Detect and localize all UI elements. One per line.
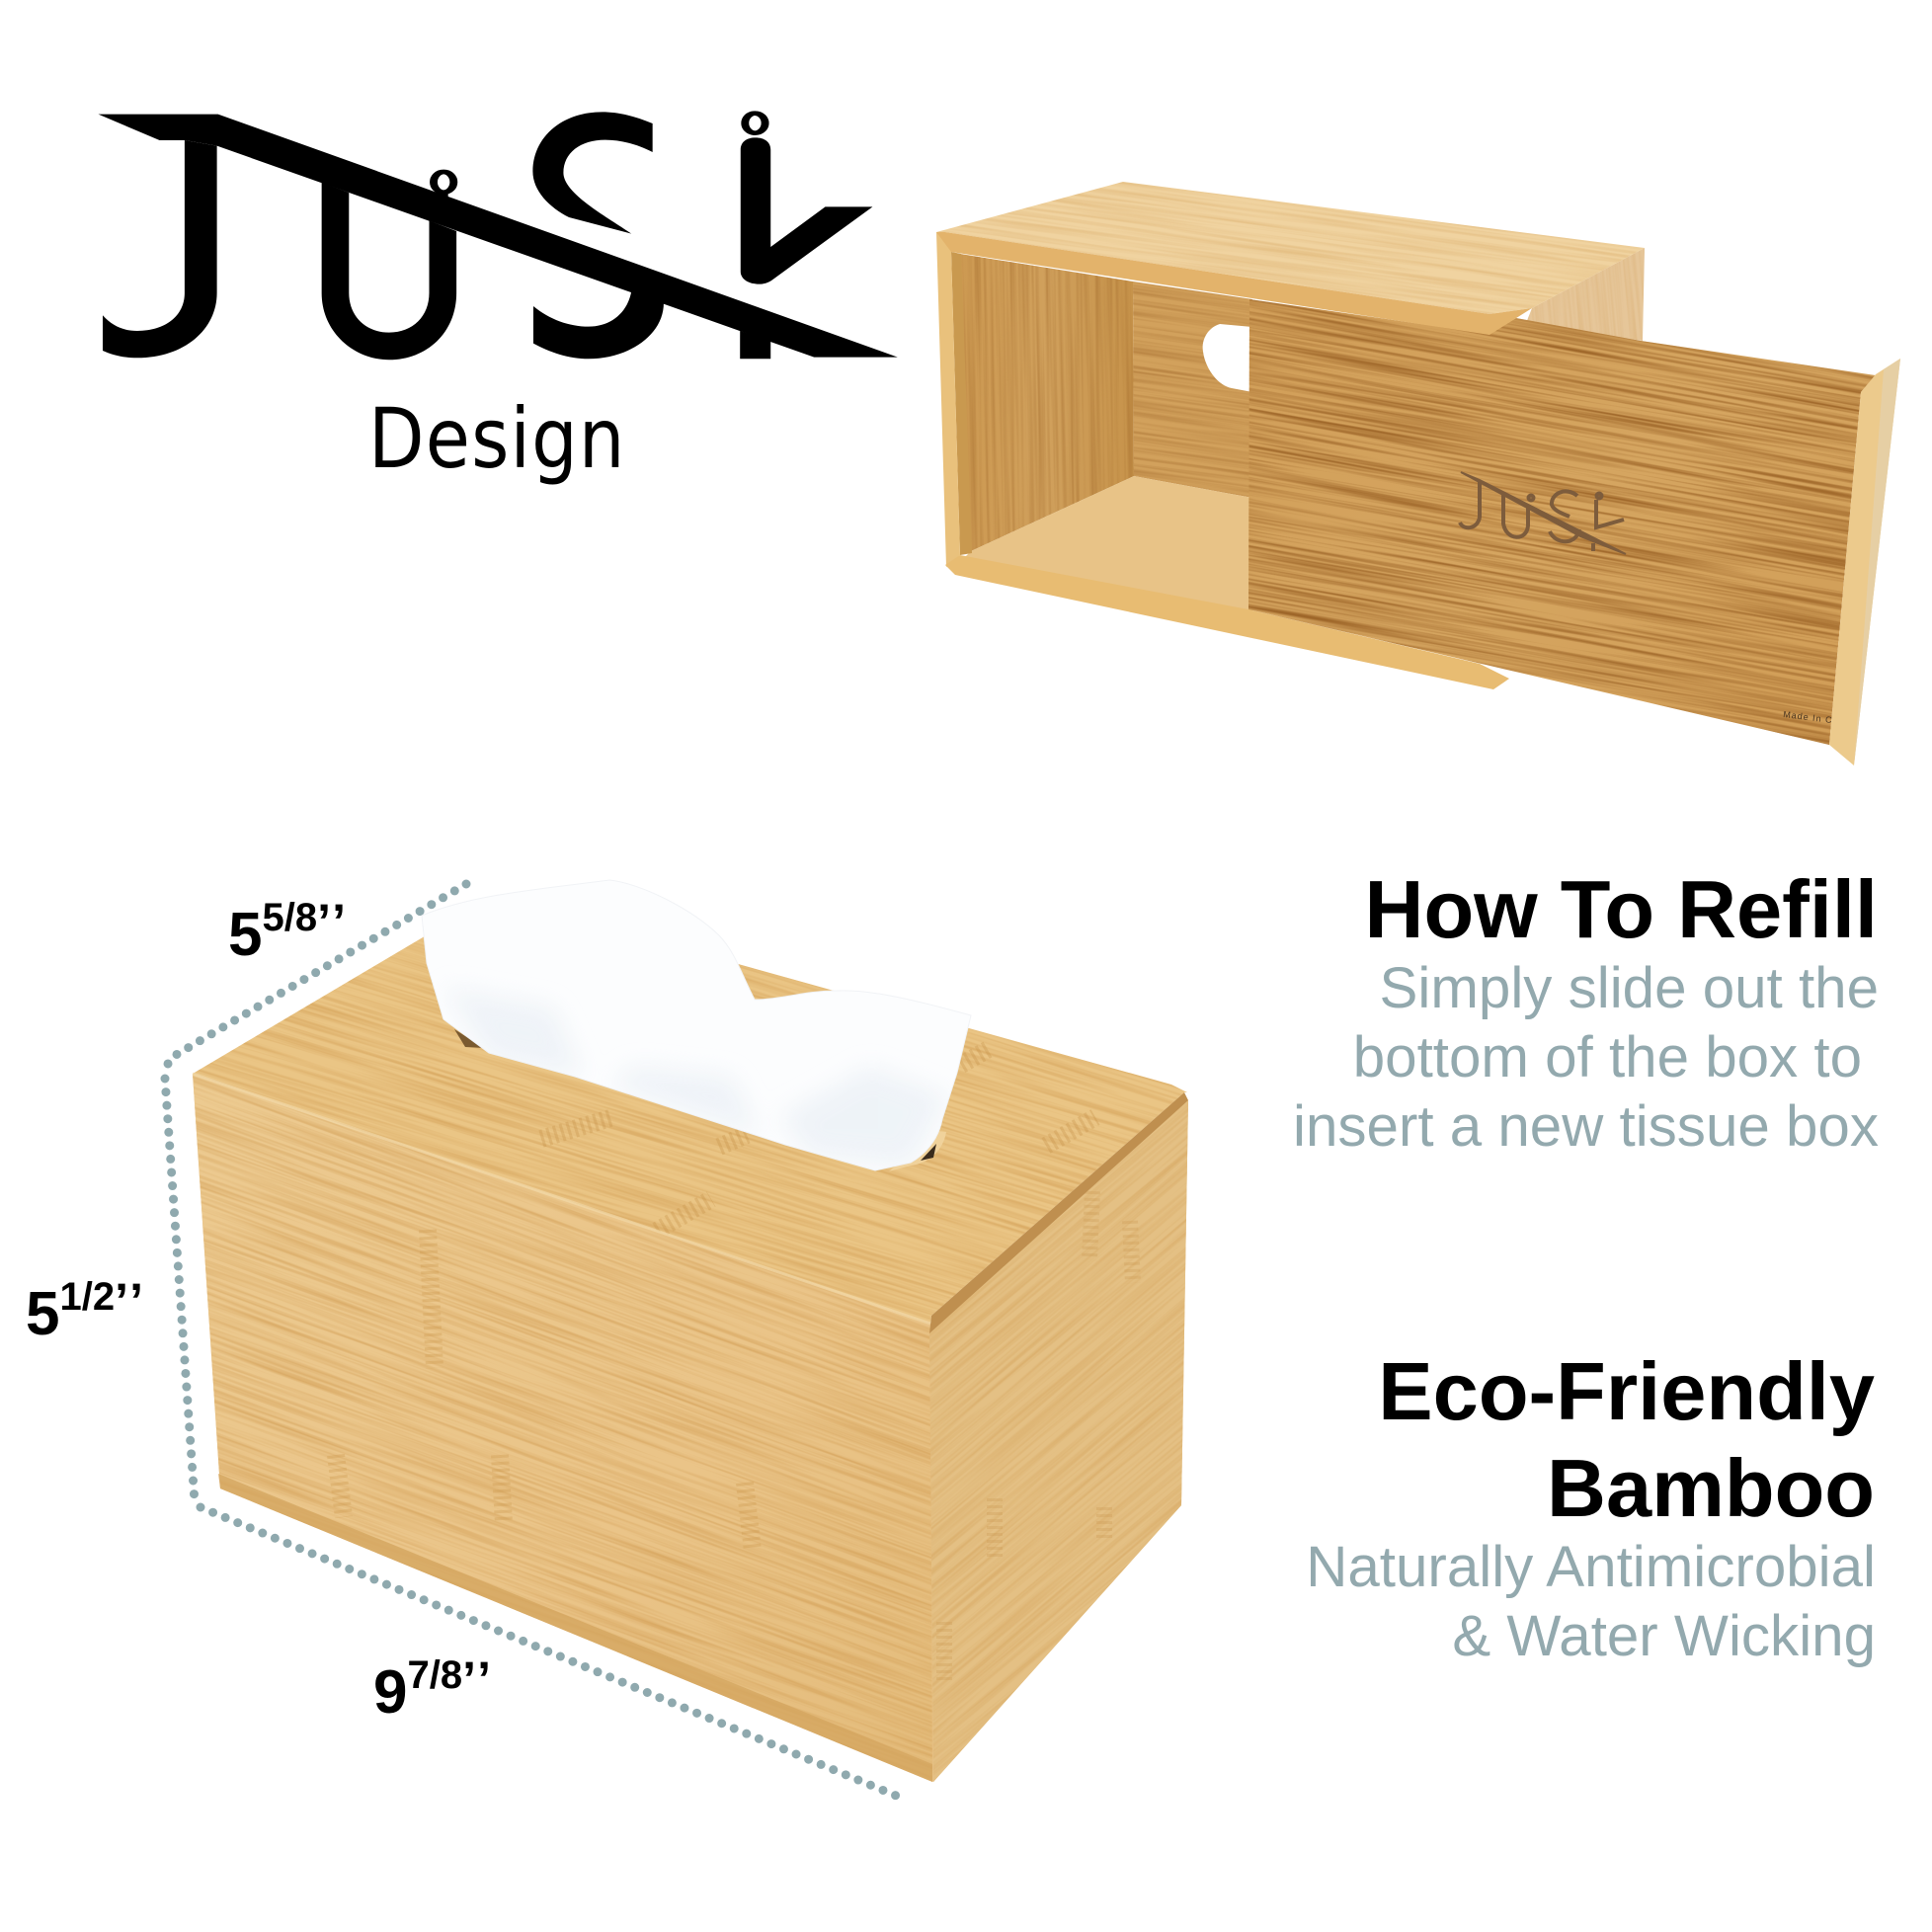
door end cap xyxy=(1829,359,1900,765)
interior left wall xyxy=(961,254,1134,551)
block: eco-friendly bamboo xyxy=(1306,1345,1876,1668)
dimension: depth 5 5/8: 5 xyxy=(228,901,262,969)
front face bamboo nodes xyxy=(336,1230,753,1551)
interior floor xyxy=(963,476,1252,614)
dimension: height 5 1/2: ’’ xyxy=(115,1273,146,1328)
front face rim highlight xyxy=(193,1074,930,1324)
description: how to refill: Simply slide out the xyxy=(1379,956,1879,1020)
description: eco-friendly bamboo: Naturally Antimicrobial xyxy=(1306,1535,1876,1599)
description: how to refill: insert a new tissue box xyxy=(1293,1094,1879,1159)
dimension: width 9 7/8: 9 xyxy=(373,1658,407,1727)
dimension: depth 5 5/8: ’’ xyxy=(317,894,349,949)
top panel front lip xyxy=(936,232,1532,335)
top chamfer edge xyxy=(929,1092,1188,1333)
interior back wall xyxy=(1133,282,1252,498)
bottom frame rail xyxy=(945,555,1509,689)
top face bamboo nodes xyxy=(541,1049,1095,1231)
box top panel xyxy=(936,182,1644,314)
description: eco-friendly bamboo xyxy=(1306,1535,1876,1668)
sliding door panel xyxy=(1248,299,1875,745)
white tissue xyxy=(422,880,971,1170)
engraved logo on door xyxy=(1460,472,1626,554)
dimension guide: dotted outline xyxy=(165,884,906,1800)
description: how to refill xyxy=(1293,956,1879,1159)
description: how to refill: bottom of the box to xyxy=(1353,1025,1862,1089)
tissue opening in back wall xyxy=(1203,324,1252,392)
photo: open bamboo box with sliding panel xyxy=(936,182,1900,765)
description: eco-friendly bamboo: & Water Wicking xyxy=(1452,1604,1876,1668)
heading: eco-friendly bamboo: Bamboo xyxy=(1547,1442,1875,1534)
tissue slot xyxy=(454,1029,946,1171)
box right side face xyxy=(929,1100,1188,1782)
stamp: made in china: Made In Chi xyxy=(1783,709,1842,726)
box front face xyxy=(193,1075,932,1782)
dark sliver at left wall xyxy=(951,252,972,555)
logo word: Design: Design xyxy=(368,390,624,487)
front face bottom strip xyxy=(218,1474,932,1782)
box underlay xyxy=(193,1074,1188,1782)
dimension: width 9 7/8: 7/8 xyxy=(407,1653,462,1697)
dimension: width 9 7/8: ’’ xyxy=(462,1651,494,1707)
block: how to refill xyxy=(1293,863,1879,1159)
side face bamboo nodes xyxy=(944,1191,1133,1684)
photo: bamboo tissue box with tissue xyxy=(192,879,1188,1782)
heading: eco-friendly bamboo xyxy=(1378,1345,1875,1534)
heading: eco-friendly bamboo: Eco-Friendly xyxy=(1378,1345,1875,1437)
dimension: height 5 1/2: 5 xyxy=(26,1280,59,1348)
left frame xyxy=(936,232,960,567)
logo mark xyxy=(98,112,898,360)
box back right side xyxy=(1527,248,1645,341)
dimension: height 5 1/2: 1/2 xyxy=(59,1275,115,1319)
heading: how to refill: How To Refill xyxy=(1365,863,1878,955)
box top face xyxy=(193,936,1187,1324)
brand logo: Jusi Design xyxy=(98,112,898,487)
dimension: depth 5 5/8: 5/8 xyxy=(262,896,317,939)
